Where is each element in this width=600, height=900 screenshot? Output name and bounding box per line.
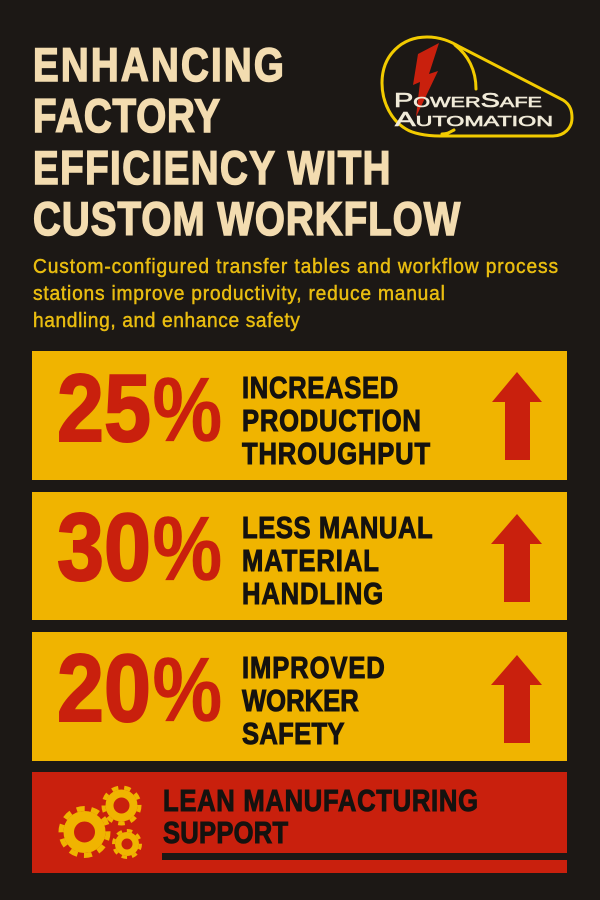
label: increased production throughput: INCREASED (242, 371, 398, 404)
logo outline (382, 37, 572, 136)
title: EFFICIENCY WITH (33, 142, 391, 195)
icon: up arrow (491, 655, 542, 743)
panel: 25% throughput (32, 351, 567, 480)
icon: lightning bolt (413, 43, 439, 117)
logo text: A UTOMATION (395, 109, 553, 131)
title (33, 39, 461, 246)
stat: 25%: % (152, 358, 222, 460)
label: improved worker safety (242, 651, 385, 750)
label: lean manufacturing support: LEAN MANUFACTURING (163, 784, 478, 817)
label: less manual material handling: LESS MANUAL (242, 511, 433, 544)
icon: up arrow (492, 372, 542, 460)
stat: 30% (57, 494, 222, 601)
logo: PowerSafe Automation (382, 37, 572, 136)
label: less manual material handling (242, 511, 433, 610)
subtitle: Custom-configured transfer tables and workflow process (33, 256, 558, 278)
label: increased production throughput (242, 371, 430, 470)
label: less manual material handling: HANDLING (242, 577, 383, 610)
label: improved worker safety: WORKER (242, 684, 359, 717)
label: lean manufacturing support (163, 784, 478, 849)
label: improved worker safety: SAFETY (242, 717, 345, 750)
stat: 25%: 25 (57, 355, 151, 462)
label: increased production throughput: THROUGHPUT (242, 437, 430, 470)
icon: gears (61, 788, 140, 858)
stat: 20%: 20 (57, 635, 151, 742)
panel: 30% material handling (32, 492, 567, 620)
logo text (394, 90, 553, 131)
panel: lean manufacturing support (32, 772, 567, 873)
title: CUSTOM WORKFLOW (33, 193, 461, 246)
panel: 20% worker safety (32, 632, 567, 761)
stat: 25% (57, 355, 222, 462)
stat: 20% (57, 635, 222, 742)
label: lean manufacturing support: SUPPORT (163, 816, 288, 849)
stat: 30%: 30 (57, 494, 151, 601)
label: improved worker safety: IMPROVED (242, 651, 385, 684)
logo text: P OWER S AFE (394, 90, 542, 112)
icon: up arrow (491, 514, 542, 602)
subtitle (33, 256, 558, 332)
stat: 30%: % (152, 497, 222, 599)
subtitle: stations improve productivity, reduce manual (33, 283, 445, 305)
title: FACTORY (33, 90, 220, 143)
title: ENHANCING (33, 39, 284, 92)
label: increased production throughput: PRODUCTION (242, 404, 421, 437)
stat: 20%: % (152, 638, 222, 740)
label: less manual material handling: MATERIAL (242, 544, 379, 577)
subtitle: handling, and enhance safety (33, 310, 300, 332)
